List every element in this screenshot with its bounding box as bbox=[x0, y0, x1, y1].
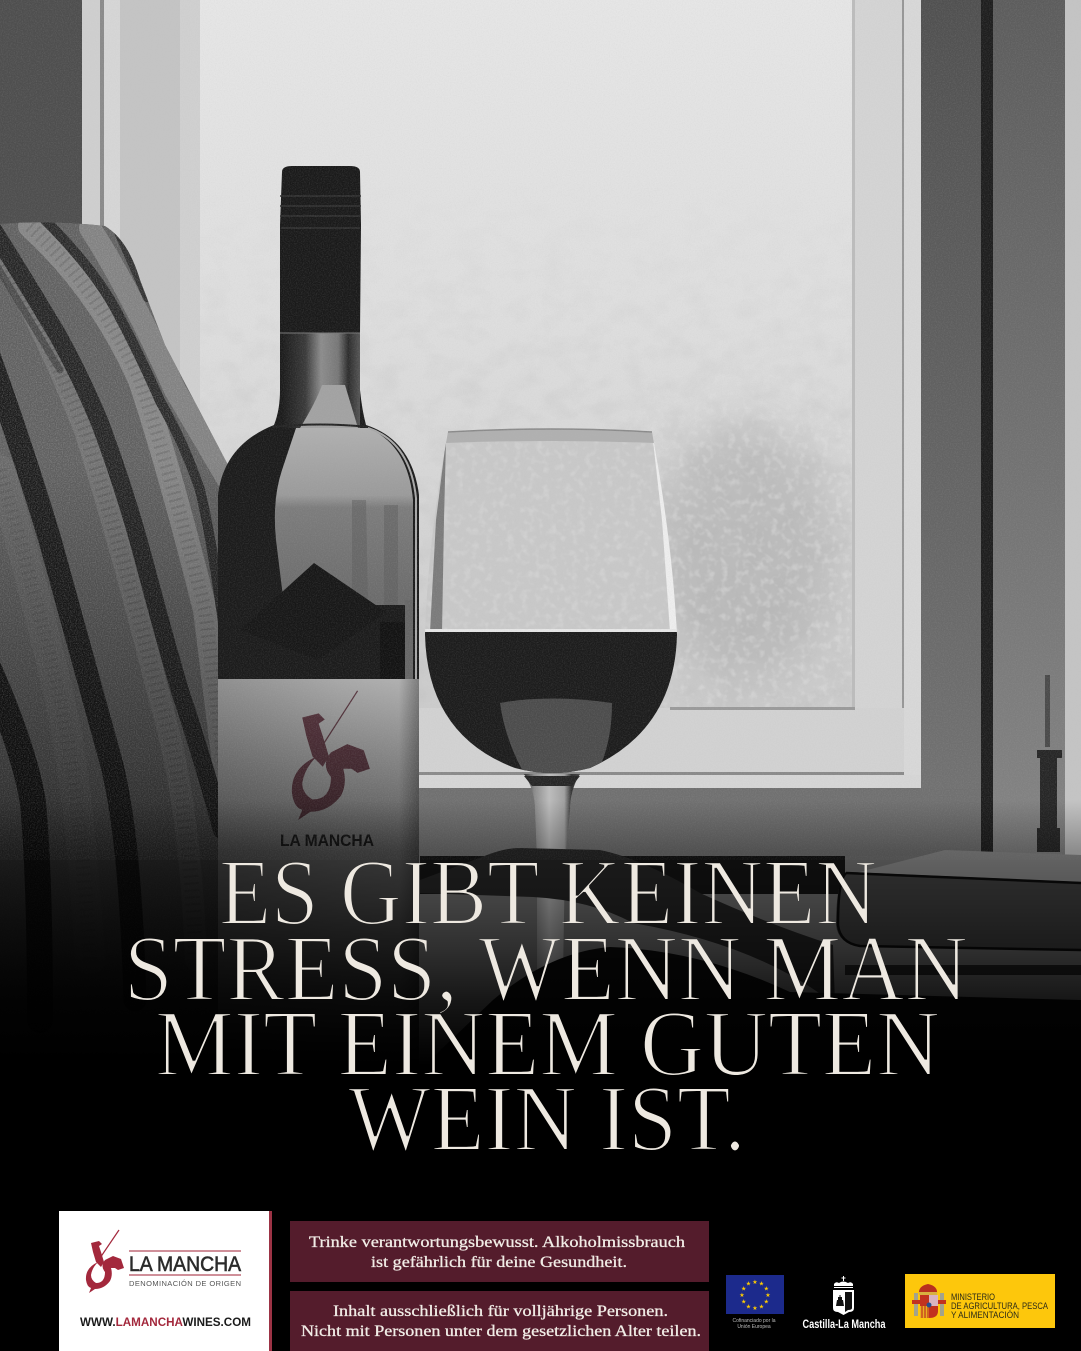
logo wordmark: LA MANCHA bbox=[129, 1253, 241, 1276]
glass bowl bbox=[420, 420, 680, 782]
logo: European Union: ★ bbox=[739, 1292, 745, 1299]
panel: age notice: Inhalt ausschließlich für volljährige Personen. bbox=[333, 1303, 668, 1320]
hand holding glass bbox=[420, 848, 1081, 1070]
logo: Castilla-La Mancha bbox=[802, 1276, 886, 1331]
wine glass bbox=[420, 420, 680, 975]
website url: WWW.LAMANCHAWINES.COM bbox=[80, 1317, 251, 1329]
logo wordmark: DENOMINACIÓN DE ORIGEN bbox=[129, 1279, 241, 1288]
logo: European Union: ★ bbox=[741, 1298, 746, 1306]
logo: Castilla-La Mancha: Castilla-La Mancha bbox=[802, 1317, 886, 1331]
window sill bbox=[400, 707, 981, 860]
striped cloth bbox=[0, 222, 228, 968]
headline line 1: ES GIBT KEINEN bbox=[219, 841, 877, 945]
logo: European Union: Cofinanciado por la bbox=[732, 1318, 776, 1324]
logo: European Union bbox=[726, 1275, 784, 1330]
ribbing on bands bbox=[0, 258, 185, 778]
headline bbox=[124, 841, 968, 1171]
logo: European Union: ★ bbox=[746, 1281, 751, 1288]
left wall and window frame bbox=[0, 0, 200, 480]
logo: European Union: ★ bbox=[741, 1286, 746, 1292]
photo: wine bottle and glass at a window bbox=[0, 0, 1081, 1040]
logo: European Union: ★ bbox=[759, 1281, 764, 1288]
logo: European Union: ★ bbox=[746, 1303, 751, 1310]
logo: European Union: ★ bbox=[765, 1292, 771, 1299]
panel: La Mancha logo card bbox=[59, 1211, 272, 1351]
book bbox=[836, 850, 1081, 950]
bottle diamond label bbox=[240, 563, 386, 660]
logo: European Union: ★ bbox=[752, 1305, 758, 1312]
panel: age notice: Nicht mit Personen unter dem gesetzlichen Alter teilen. bbox=[301, 1323, 701, 1340]
panel: age notice bbox=[290, 1291, 709, 1351]
wine bottle bbox=[218, 166, 419, 1065]
bottle main label bbox=[218, 679, 419, 1065]
panel: responsibility notice: Trinke verantwortungsbewusst. Alkoholmissbrauch bbox=[309, 1234, 685, 1251]
headline line 3: MIT EINEM GUTEN bbox=[155, 992, 940, 1096]
label logo rider bbox=[292, 691, 370, 820]
logo: European Union: ★ bbox=[759, 1303, 764, 1310]
logo: Ministerio de Agricultura: Y ALIMENTACIÓN bbox=[951, 1310, 1019, 1320]
logo: European Union: ★ bbox=[764, 1286, 769, 1292]
label text: LA MANCHA bbox=[280, 831, 374, 850]
logo: Ministerio de Agricultura: MINISTERIO bbox=[951, 1292, 995, 1302]
logo: Ministerio de Agricultura: DE AGRICULTURA, PESCA bbox=[951, 1301, 1048, 1311]
window glass with misty garden bbox=[195, 0, 860, 720]
logo: European Union: ★ bbox=[752, 1279, 758, 1286]
black bottom fade bbox=[0, 800, 1081, 1066]
bottle capsule bbox=[280, 166, 361, 333]
table surface bbox=[400, 856, 1081, 1066]
icon: La Mancha rider on horse bbox=[86, 1230, 124, 1293]
logo: Ministerio de Agricultura bbox=[905, 1274, 1055, 1328]
headline line 4: WEIN IST. bbox=[348, 1067, 746, 1171]
logo: European Union: ★ bbox=[764, 1298, 769, 1306]
bottle body glass bbox=[218, 334, 419, 679]
panel: responsibility notice: ist gefährlich für deine Gesundheit. bbox=[371, 1254, 627, 1271]
lighter woven bands bbox=[0, 258, 196, 819]
panel: responsibility notice bbox=[290, 1221, 709, 1282]
glass stem bbox=[524, 774, 580, 975]
window latch bbox=[1037, 675, 1062, 852]
icon: Spanish coat of arms bbox=[912, 1284, 946, 1318]
right window frame and wall bbox=[852, 0, 1081, 860]
film grain bbox=[0, 0, 1081, 860]
logo: European Union: Unión Europea bbox=[737, 1324, 771, 1330]
dark stripes bbox=[0, 345, 135, 1000]
logo wordmark bbox=[129, 1250, 241, 1288]
headline line 2: STRESS, WENN MAN bbox=[124, 917, 968, 1021]
